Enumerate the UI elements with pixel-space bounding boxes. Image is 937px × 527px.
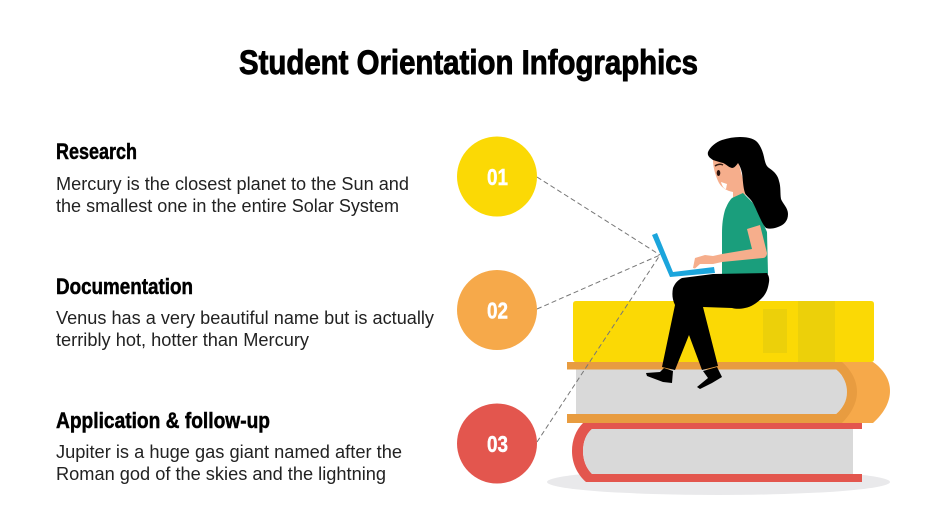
connector lines <box>537 177 660 442</box>
description: application and follow-up: Jupiter is a huge gas giant named after the <box>56 442 402 462</box>
laptop <box>652 233 715 277</box>
heading: application and follow-up: Application & follow-up <box>56 408 270 433</box>
yellow book <box>573 301 874 362</box>
step 02: 02 <box>487 298 508 324</box>
face and neck <box>713 160 746 200</box>
description: documentation: Venus has a very beautiful name but is actually <box>56 308 434 328</box>
hair <box>708 137 788 229</box>
ground shadow <box>547 469 890 495</box>
arm and hand <box>693 225 767 268</box>
step 03: 03 <box>487 431 508 457</box>
green shirt <box>722 193 768 274</box>
smile <box>721 182 727 189</box>
step 02 <box>457 270 537 350</box>
description: application and follow-up <box>56 442 402 484</box>
description: documentation: terribly hot, hotter than Mercury <box>56 330 309 350</box>
description: documentation <box>56 308 434 350</box>
trousers <box>662 273 769 370</box>
step 03 <box>457 404 537 484</box>
title: Student Orientation Infographics <box>239 44 698 82</box>
illustration: stacked books <box>547 301 890 495</box>
heading: research: Research <box>56 139 137 164</box>
left shoe <box>646 368 673 383</box>
step 01: 01 <box>487 164 508 190</box>
right shoe <box>697 367 722 389</box>
step 01 <box>457 136 537 216</box>
orange book <box>567 362 890 423</box>
description: research <box>56 174 409 216</box>
heading: documentation: Documentation <box>56 274 193 299</box>
description: research: the smallest one in the entire Solar System <box>56 196 399 216</box>
description: application and follow-up: Roman god of the skies and the lightning <box>56 464 386 484</box>
text block: research <box>56 139 409 216</box>
text block: application and follow-up <box>56 408 402 484</box>
illustration: student with laptop <box>646 137 788 389</box>
eye and brow <box>715 164 723 176</box>
description: research: Mercury is the closest planet to the Sun and <box>56 174 409 194</box>
red book <box>572 423 862 482</box>
text block: documentation <box>56 274 434 350</box>
